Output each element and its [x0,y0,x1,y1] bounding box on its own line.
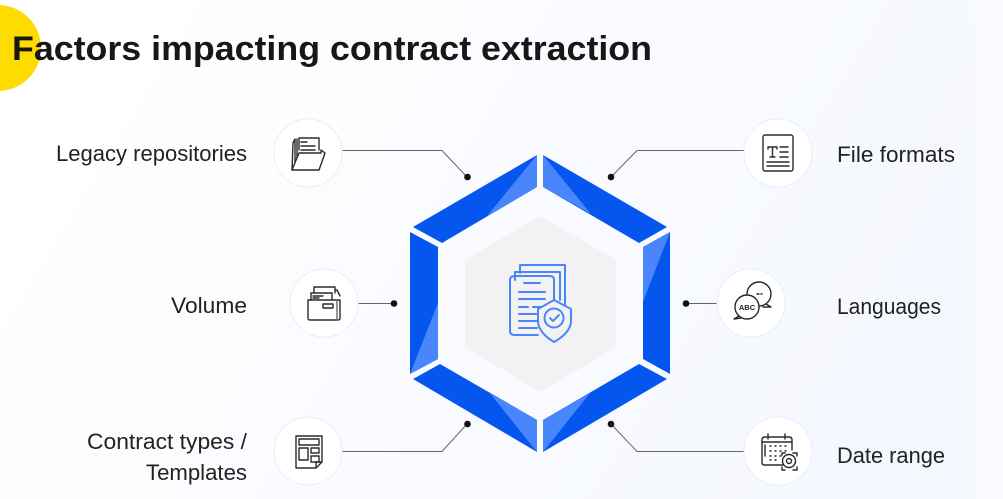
central hexagon diagram [410,155,670,452]
segment: bottom right [543,364,667,452]
icon: open folder [274,119,342,187]
title: Factors impacting contract extraction [12,30,652,68]
segment: left [410,232,438,374]
label: volume: Volume [171,293,247,318]
icon: filing box [290,269,358,337]
icon: calendar with target [744,417,812,485]
label: file formats: File formats [837,142,955,167]
icon: documents with shield [510,265,571,342]
segment: top left [413,155,537,243]
connector: date range [608,421,745,452]
connector: volume [358,300,397,307]
icon: text file [744,119,812,187]
label: legacy repositories: Legacy repositories [56,141,247,166]
connector: file formats [608,150,745,180]
connector: contract types [342,421,471,452]
label: languages: Languages [837,294,941,319]
label: contract types / templates: Templates [146,460,247,485]
label: date range: Date range [837,443,945,468]
icon: speech bubbles ABC [717,269,785,337]
grey inner hexagon [465,216,616,392]
segment: top right [543,155,667,243]
icon: speech bubbles ABC: ABC [739,303,756,312]
connector: languages [683,300,717,307]
label: contract types / templates [87,429,248,485]
segment: bottom left [413,364,537,452]
label: contract types / templates: Contract types / [87,429,248,454]
connector: legacy repositories [342,150,471,180]
yellow accent circle [0,5,41,91]
segment: right [643,232,670,374]
icon: template document [274,417,342,485]
